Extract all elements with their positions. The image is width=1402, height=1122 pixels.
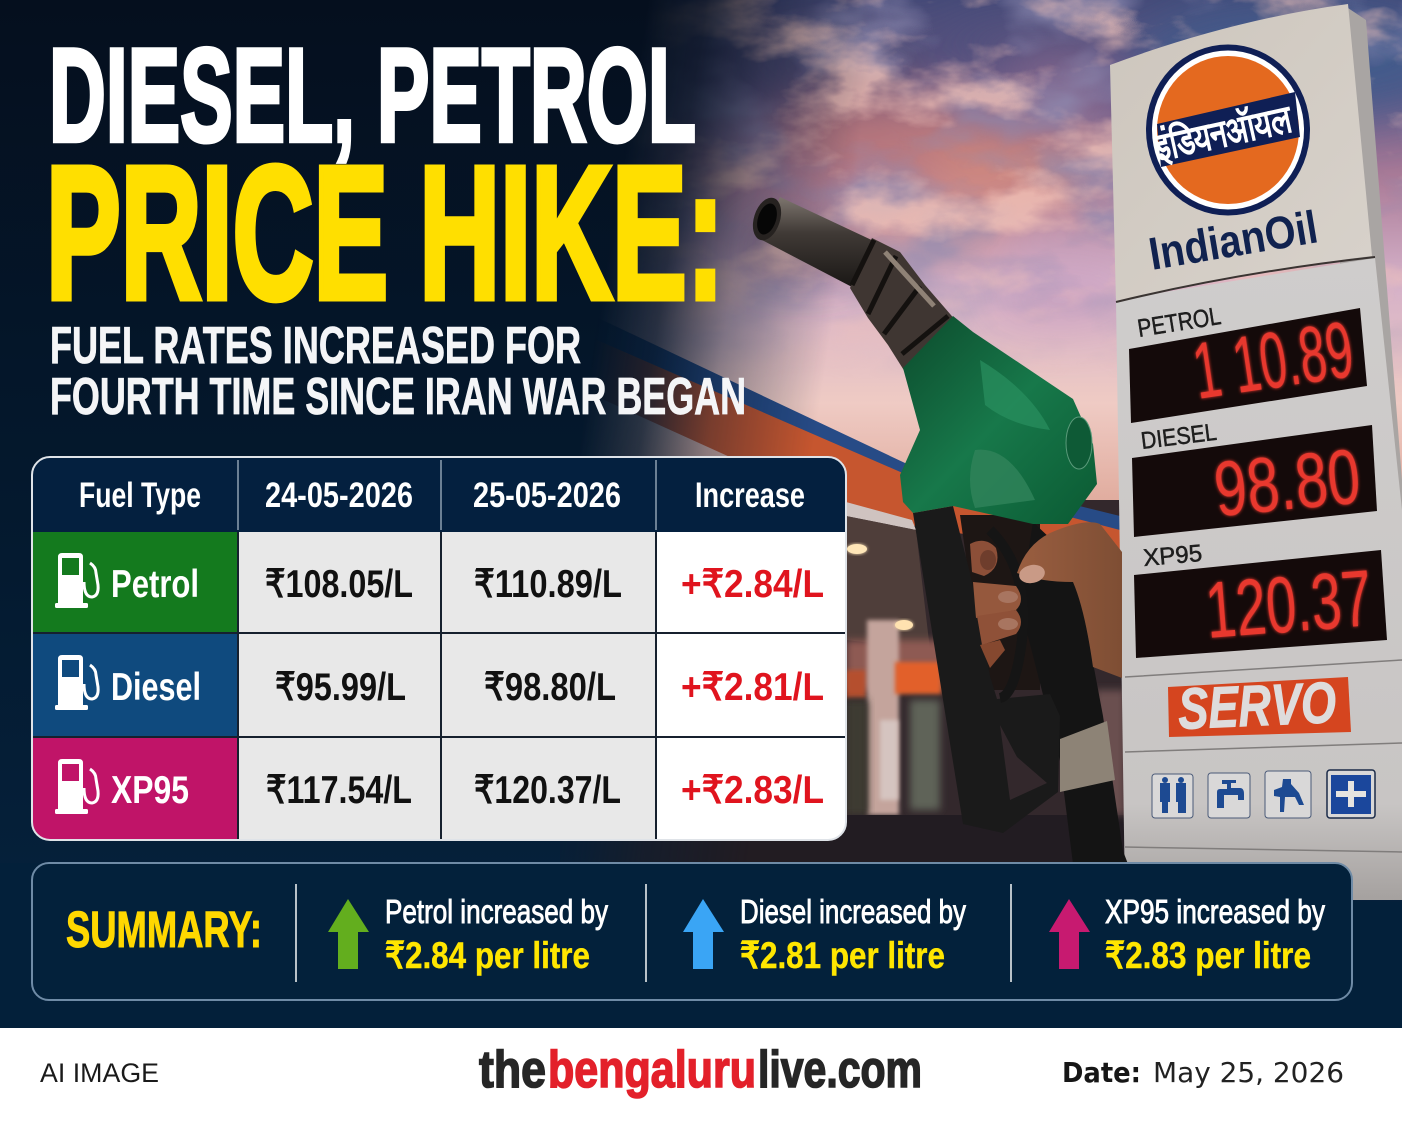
summary: Petrol: Petrol increased by	[385, 893, 608, 930]
label: DIESEL: DIESEL	[1139, 419, 1218, 455]
row: Diesel: ₹98.80/L	[484, 666, 616, 709]
sign lower panel	[1116, 258, 1402, 900]
station building: canopy, pillar and forecourt	[598, 326, 1124, 862]
title line: PRICE HIKE: PRICE HIKE:	[46, 128, 724, 339]
logo Hindi wordmark: इंडियनऑयल	[1149, 91, 1299, 180]
summary: XP95: XP95 increased by	[1105, 893, 1325, 930]
IndianOil wordmark: IndianOil	[1145, 201, 1321, 280]
SERVO badge: SERVO	[1177, 670, 1337, 742]
site wordmark: bengaluru	[548, 1041, 756, 1099]
hose and grip	[1020, 522, 1128, 864]
summary: Petrol: ₹2.84 per litre	[385, 935, 590, 976]
fuel price sign: IndianOil totem	[1110, 4, 1402, 900]
row: Petrol: ₹110.89/L	[474, 563, 622, 606]
site wordmark	[479, 1041, 922, 1099]
green nozzle housing	[900, 316, 1097, 524]
display: diesel price	[1132, 425, 1377, 537]
summary: XP95	[1049, 893, 1325, 976]
row: XP95	[55, 759, 824, 814]
trigger	[990, 530, 1023, 698]
row: Petrol: +₹2.84/L	[681, 563, 824, 606]
row: XP95: ₹117.54/L	[266, 769, 412, 812]
sign top panel	[1110, 4, 1372, 302]
amenity icon: first aid	[1327, 770, 1375, 818]
summary: Diesel: ₹2.81 per litre	[740, 935, 945, 976]
row: Diesel: +₹2.81/L	[681, 666, 824, 709]
title	[46, 22, 724, 339]
summary: Petrol	[328, 893, 608, 976]
title line: DIESEL, PETROL: DIESEL, PETROL	[49, 22, 696, 170]
hand and fingers	[970, 522, 1122, 678]
site wordmark: the	[479, 1041, 546, 1099]
row: Diesel: ₹95.99/L	[275, 666, 406, 709]
amenity icon: washing	[1265, 771, 1311, 818]
handle frame	[913, 506, 1060, 833]
display: XP95 price	[1134, 550, 1387, 658]
summary heading: SUMMARY:	[66, 901, 262, 958]
summary: Diesel	[683, 893, 966, 976]
summary: XP95: ₹2.83 per litre	[1105, 935, 1311, 976]
amenity icon: toilets	[1152, 774, 1193, 818]
row: XP95: +₹2.83/L	[681, 769, 824, 812]
site wordmark: live.com	[758, 1041, 922, 1099]
table header row: Fuel Type	[79, 476, 201, 515]
table header row: 25-05-2026	[473, 476, 621, 515]
row: Petrol	[55, 553, 824, 608]
IndianOil logo	[1146, 44, 1310, 216]
row: Diesel: Diesel	[111, 666, 201, 709]
dark gap behind the fingers	[960, 515, 1040, 690]
subtitle line 2: FOURTH TIME SINCE IRAN WAR BEGAN	[50, 368, 746, 426]
spout	[748, 194, 957, 372]
row: XP95: ₹120.37/L	[474, 769, 621, 812]
label: PETROL: PETROL	[1136, 302, 1223, 343]
table header row	[79, 476, 805, 515]
fuel nozzle held in a hand	[748, 194, 1128, 864]
row: Petrol: ₹108.05/L	[265, 563, 413, 606]
label: XP95: XP95	[1142, 540, 1203, 572]
summary: Diesel: Diesel increased by	[740, 893, 966, 930]
table header row: Increase	[695, 476, 805, 515]
table header row: 24-05-2026	[265, 476, 413, 515]
arrow: green up	[328, 899, 369, 969]
display: petrol price	[1129, 304, 1367, 423]
arrow: magenta up	[1049, 899, 1090, 969]
footer bar	[0, 1028, 1402, 1122]
date: Date:	[1062, 1056, 1141, 1089]
metal hose collar	[1060, 721, 1115, 792]
AI image credit: AI IMAGE	[40, 1058, 159, 1088]
row: Petrol: Petrol	[111, 563, 199, 606]
sign side edge	[1340, 8, 1402, 900]
photo scene: petrol station at dusk	[520, 0, 1402, 865]
date	[1062, 1056, 1344, 1089]
summary panel	[32, 863, 1352, 1000]
date: May 25, 2026	[1153, 1056, 1344, 1089]
arrow: blue up	[683, 899, 724, 969]
lower navy band under the scene	[0, 863, 1402, 1028]
row: Diesel	[55, 655, 824, 710]
subtitle	[50, 317, 746, 426]
sky with sunset clouds	[592, 0, 1402, 500]
subtitle line 1: FUEL RATES INCREASED FOR	[50, 317, 581, 375]
price table	[32, 457, 846, 840]
amenity icon: water tap	[1208, 773, 1250, 818]
row: XP95: XP95	[111, 769, 189, 812]
